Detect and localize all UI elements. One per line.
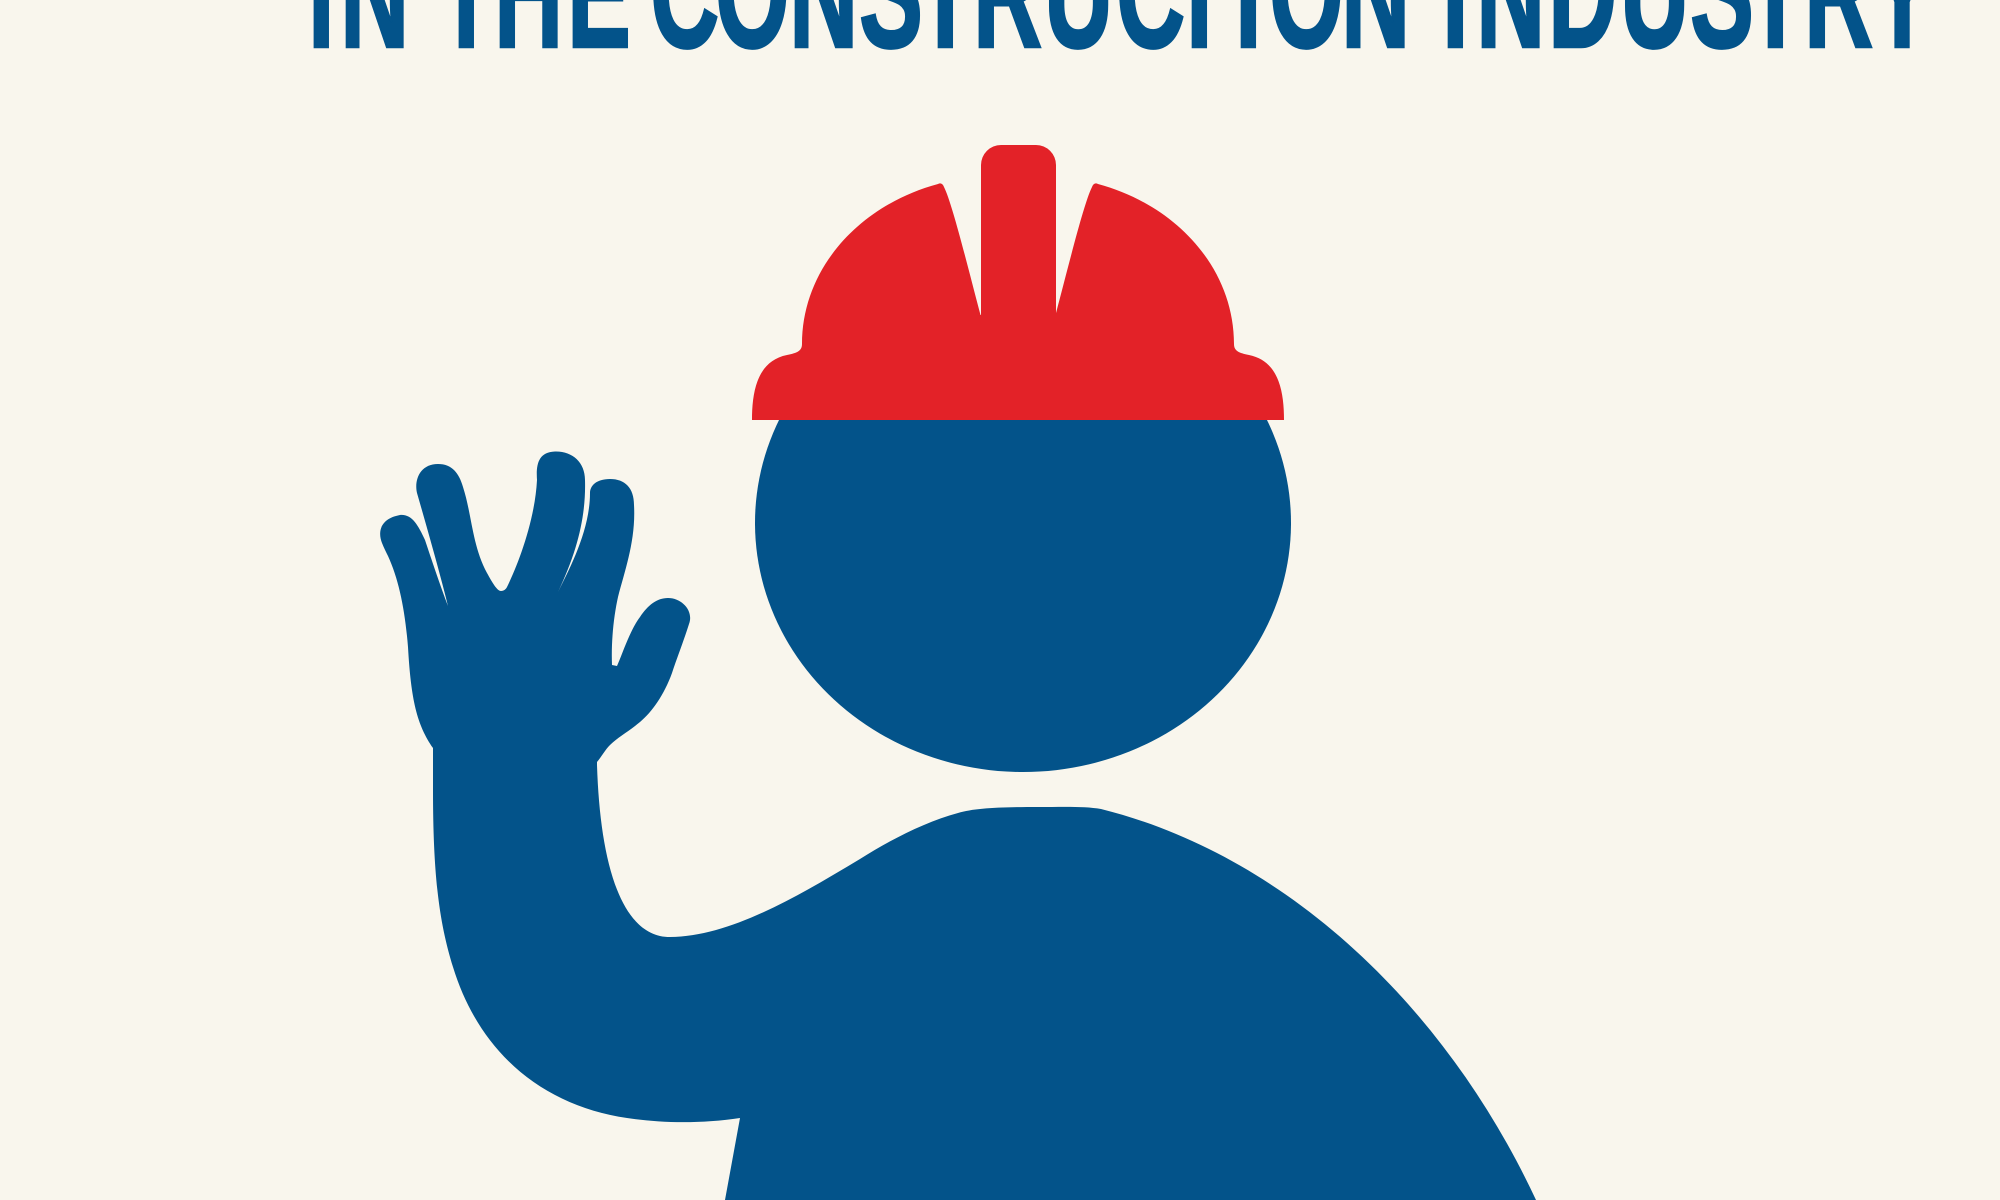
body and raised hand (380, 451, 1536, 1200)
hard hat (752, 145, 1284, 420)
head (755, 419, 1291, 772)
illustration: construction worker waving (380, 145, 1536, 1200)
